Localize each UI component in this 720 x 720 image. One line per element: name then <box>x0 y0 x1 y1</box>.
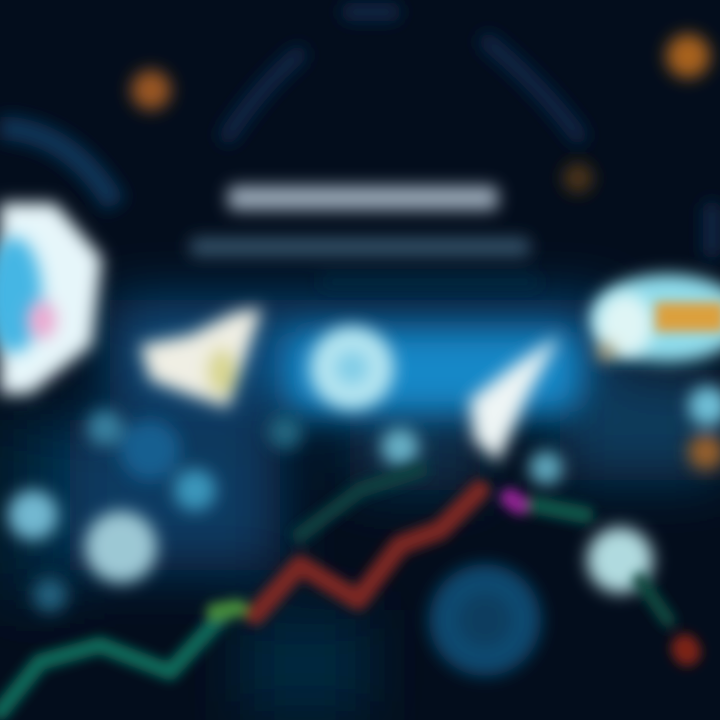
green-yellow marker <box>215 608 238 612</box>
green falling line <box>535 505 585 515</box>
left hexagon icon <box>0 203 102 394</box>
cream hand shape <box>140 308 262 408</box>
faint upper green line <box>300 470 420 535</box>
red rising line <box>255 490 480 615</box>
right small circles <box>688 386 720 470</box>
orange dots <box>131 34 710 193</box>
line chart <box>0 470 687 712</box>
scattered circles <box>8 410 653 612</box>
left arc <box>0 128 115 205</box>
red end marker <box>685 648 687 652</box>
green rising line <box>0 612 225 712</box>
magenta marker <box>510 498 520 505</box>
heading: blurred title <box>228 186 498 210</box>
green falling tail <box>640 580 668 620</box>
subheading: blurred text lines <box>190 238 540 286</box>
rocket <box>470 335 560 462</box>
bright blue central panel <box>285 332 580 412</box>
large dark gear <box>429 564 541 676</box>
decorative arcs at top <box>228 12 712 250</box>
gear circle <box>310 326 394 410</box>
right cloud panel <box>590 274 720 362</box>
background glow band <box>0 300 720 720</box>
